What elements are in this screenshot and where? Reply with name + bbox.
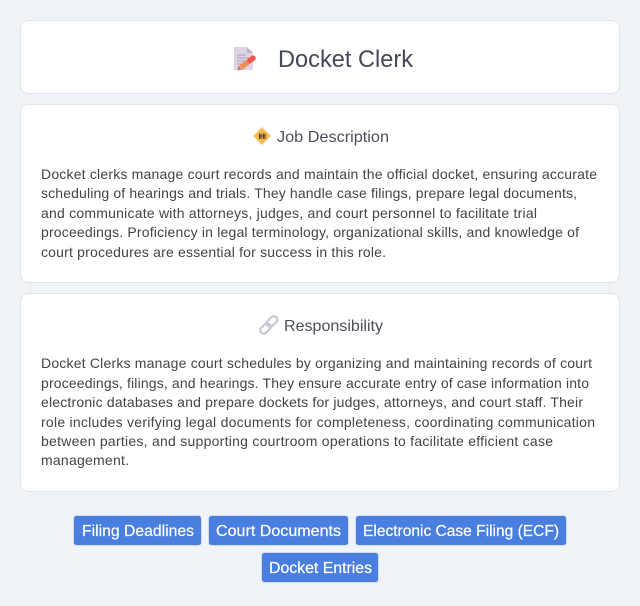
- title: Docket Clerk: [278, 46, 414, 73]
- heading: responsibility: Responsibility: [284, 318, 383, 335]
- tag: electronic case filing: [356, 516, 566, 546]
- text block: job description: Docket clerks manage court records and maintain the official docket, ensuring accurate: [41, 166, 597, 182]
- text block: responsibility: electronic databases and prepare dockets for judges, attorneys, and court staff. Their: [41, 394, 583, 410]
- tag: court documents: Court Documents: [216, 523, 341, 540]
- tag: filing deadlines: [74, 516, 202, 546]
- tag: docket entries: Docket Entries: [269, 560, 372, 577]
- text block: responsibility: proceedings, filings, and hearings. They ensure accurate entry of case information into: [41, 375, 589, 391]
- icon: document with pencil: [234, 47, 253, 70]
- tag: filing deadlines: Filing Deadlines: [82, 523, 194, 540]
- panel: title card: [20, 20, 620, 94]
- text block: job description: court procedures are essential for success in this role.: [41, 244, 386, 260]
- panel: responsibility: [20, 294, 620, 492]
- tag: electronic case filing: Electronic Case Filing (ECF): [363, 523, 559, 540]
- panel: job description: [20, 104, 620, 282]
- tag: court documents: [208, 516, 348, 546]
- heading: job description: Job Description: [277, 129, 389, 146]
- tag: docket entries: [262, 552, 378, 582]
- text block: job description: and communicate with attorneys, judges, and court personnel to facilitate trial: [41, 205, 537, 221]
- text block: responsibility: role includes verifying legal documents for completeness, coordinating communication: [41, 414, 595, 430]
- text block: job description: scheduling of hearings and trials. They handle case filings, prepare legal documents,: [41, 185, 577, 201]
- text block: responsibility: management.: [41, 452, 129, 468]
- text block: job description: proceedings. Proficiency in legal terminology, organizational skills, and knowledge of: [41, 224, 579, 240]
- text block: responsibility: between parties, and supporting courtroom operations to facilitate efficient case: [41, 433, 553, 449]
- text block: responsibility: Docket Clerks manage court schedules by organizing and maintaining records of court: [41, 355, 592, 371]
- text block: responsibility: [41, 355, 595, 468]
- icon: chain link: [259, 315, 279, 335]
- text block: job description: [41, 166, 597, 260]
- icon: diamond road sign: [254, 128, 270, 144]
